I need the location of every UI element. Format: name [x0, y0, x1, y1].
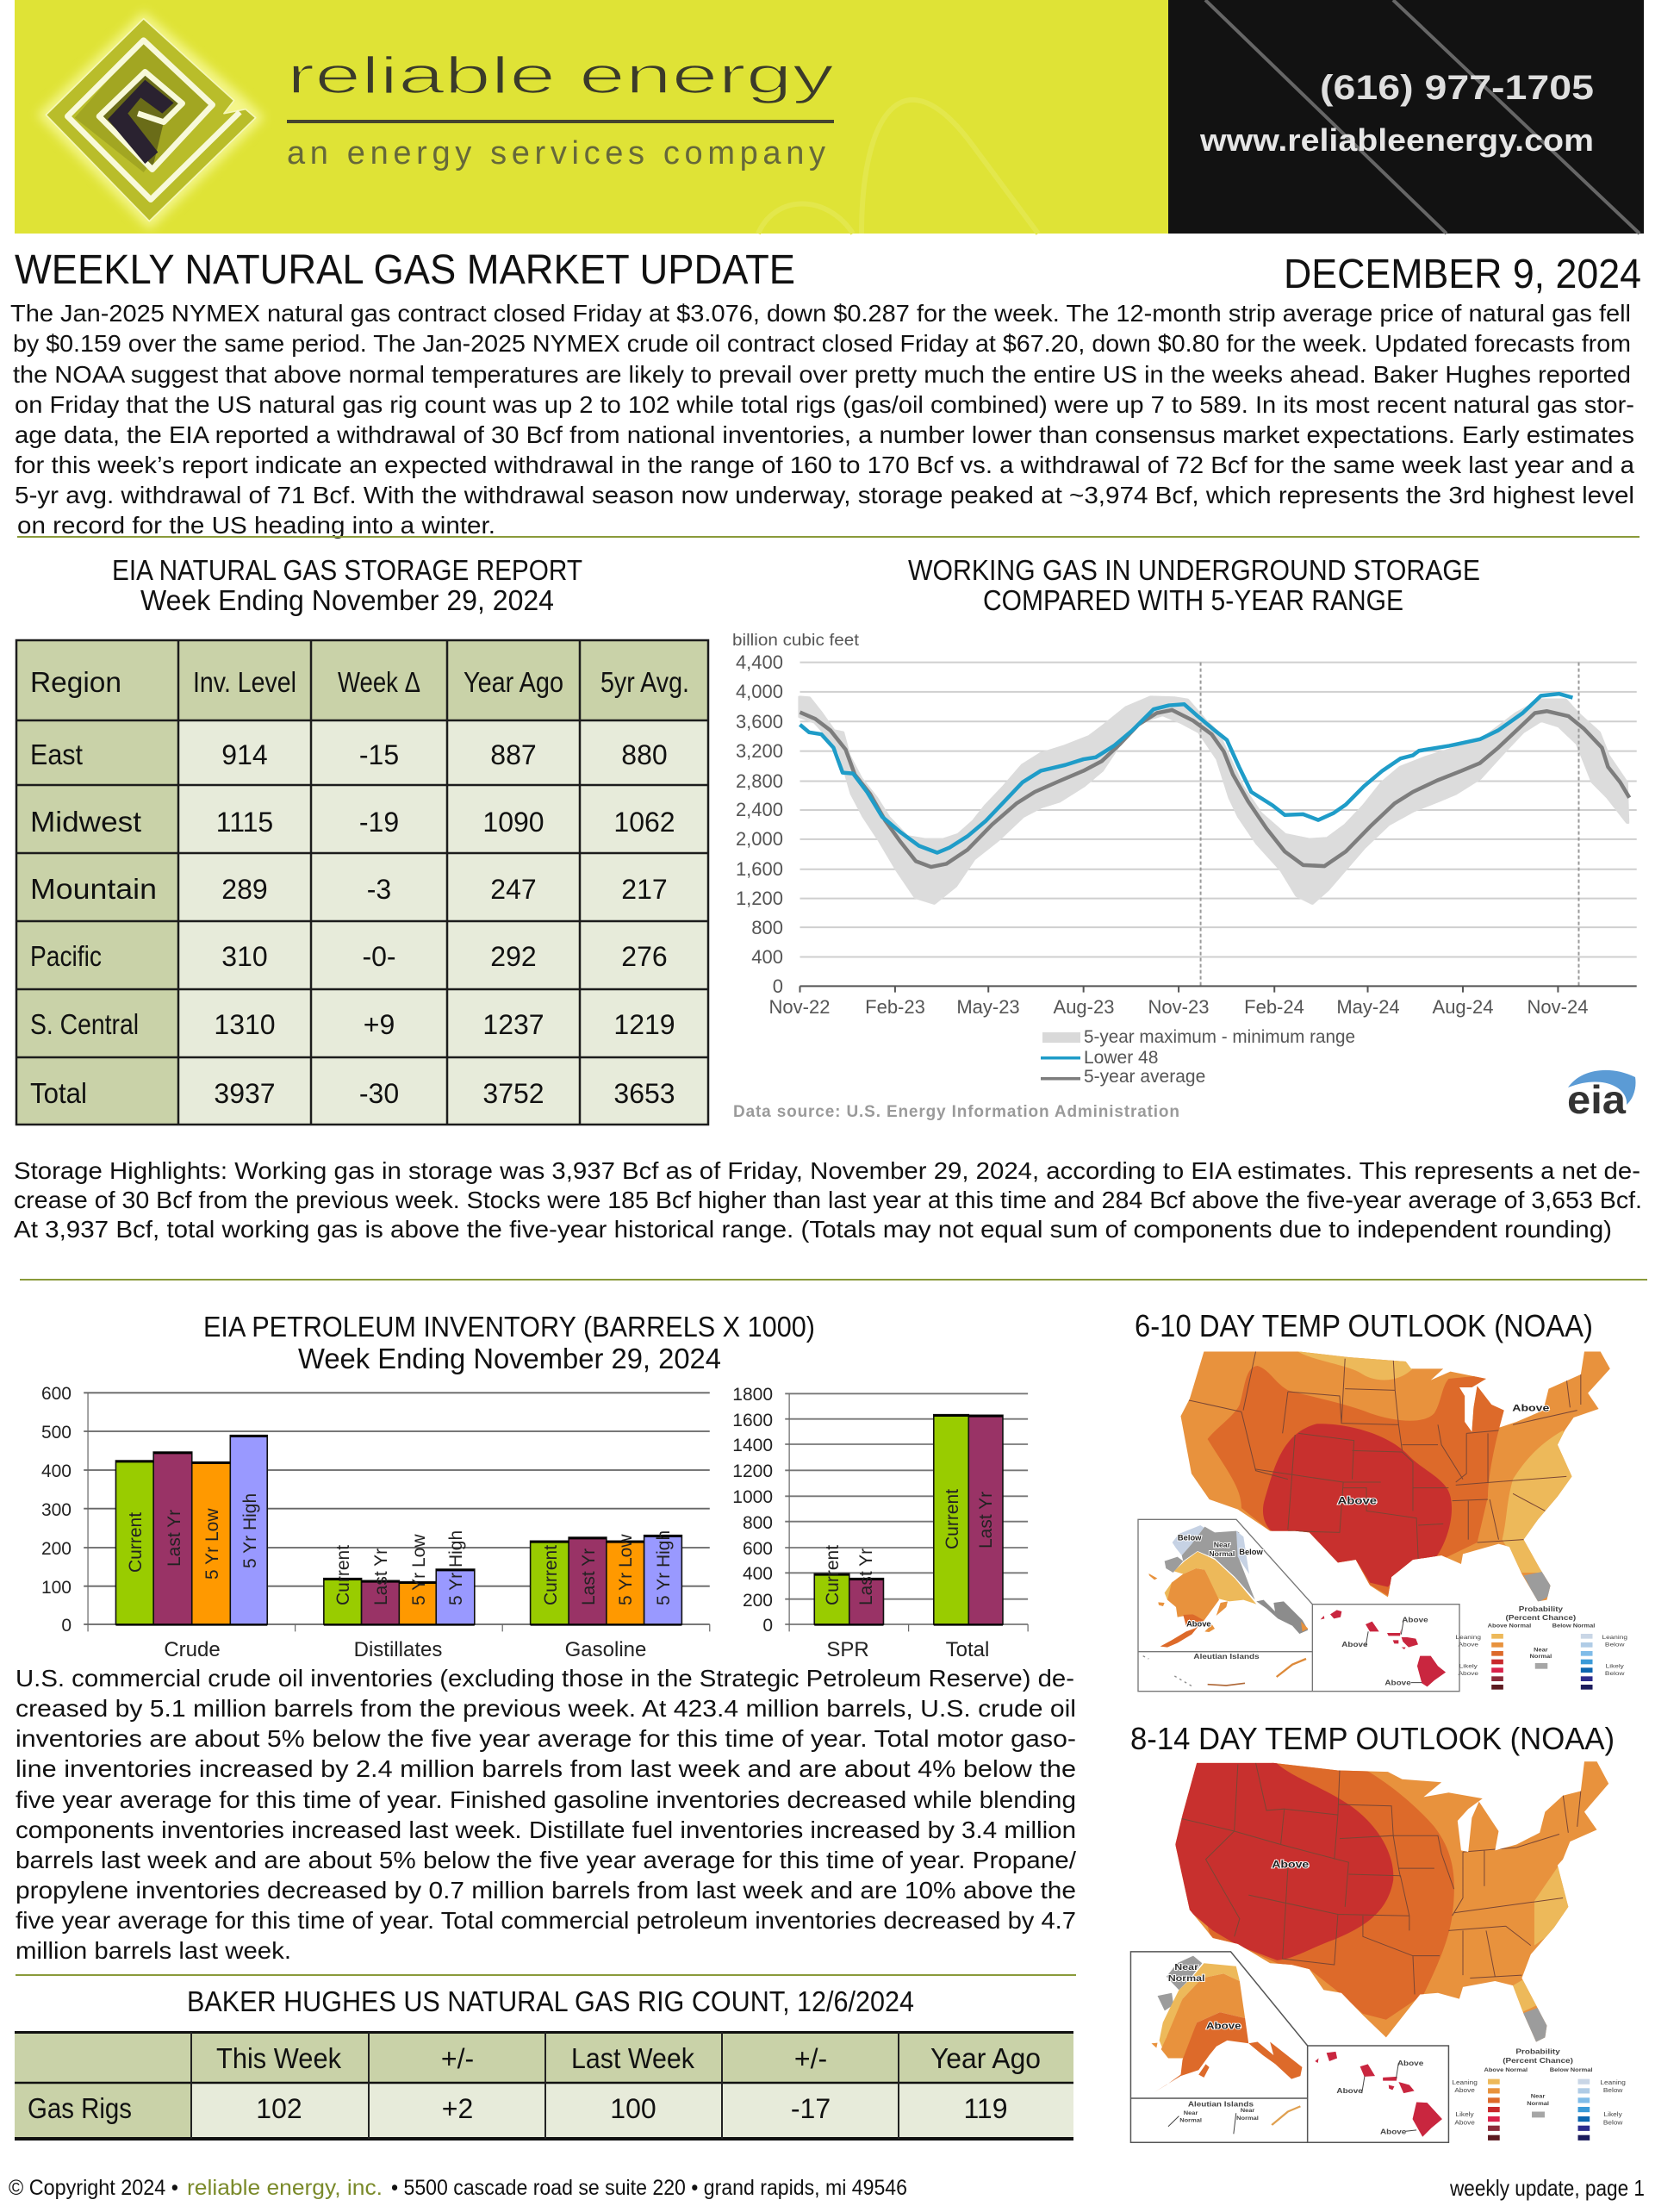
category labels: Gasoline	[565, 1638, 646, 1661]
map labels: Above	[1206, 2021, 1241, 2031]
contact panel diagonal lines	[1205, 0, 1640, 234]
y axis labels left: 100	[41, 1578, 72, 1598]
map legend: Near	[1534, 1648, 1548, 1653]
table: storage report: 1090	[482, 807, 544, 838]
footer: © Copyright 2024 •	[9, 2176, 178, 2200]
chart legend: Lower 48	[1084, 1048, 1158, 1068]
table: rig count: Year Ago	[930, 2042, 1041, 2074]
table: storage report: 1115	[216, 807, 273, 838]
map labels: Above	[1384, 1679, 1411, 1686]
y axis labels right: 1400	[732, 1436, 773, 1455]
map legend: Likely	[1604, 2111, 1622, 2118]
text block: petroleum commentary	[16, 1665, 1076, 1964]
y axis labels: 2,000	[736, 828, 783, 850]
map labels: Above	[1336, 2087, 1363, 2095]
table: storage report: 3752	[482, 1078, 544, 1109]
table: rig count: Gas Rigs	[28, 2092, 132, 2124]
x axis labels: Feb-23	[865, 996, 925, 1018]
Aleutian islands	[1272, 2106, 1300, 2125]
text block: market summary: on Friday that the US natural gas rig count was up 2 to 102 while total rigs (gas/oil combined) were up 7 to 589. In its most recent natural gas stor-	[15, 391, 1634, 418]
map labels: Aleutian Islands	[1193, 1653, 1260, 1661]
map labels: Normal	[1179, 2118, 1202, 2123]
text block: petroleum commentary: five year average for this time of year. Total commercial petroleum inventories decreased by 4.7	[16, 1907, 1076, 1934]
text block: petroleum commentary: barrels last week and are about 5% below the five year average for this time of year. Propane/	[16, 1847, 1076, 1873]
table: storage report: Region	[30, 666, 121, 698]
Hawaii leader lines	[1168, 2063, 1416, 2134]
chart legend: 5-year maximum - minimum range	[1084, 1027, 1355, 1047]
footer: • 5500 cascade road se suite 220 • grand rapids, mi 49546	[391, 2176, 907, 2200]
Alaska labels: Below	[1178, 1533, 1202, 1542]
table: storage report: 310	[221, 941, 268, 972]
text block: market summary: age data, the EIA reported a withdrawal of 30 Bcf from national inventories, a number lower than consensus market expectations. Early estimates	[15, 421, 1634, 448]
rotated bar labels: 5 Yr Low	[616, 1534, 636, 1605]
y axis labels: 3,600	[736, 711, 783, 732]
text block: petroleum commentary: inventories are about 5% below the five year average for this time of year. Total motor gaso-	[16, 1725, 1076, 1752]
map labels: Above	[1341, 1641, 1368, 1648]
y axis labels left: 400	[41, 1461, 72, 1481]
rotated bar labels	[126, 1489, 996, 1605]
text block: market summary: 5-yr avg. withdrawal of 71 Bcf. With the withdrawal season now underway, storage peaked at ~3,974 Bcf, which represents the 3rd highest level	[15, 482, 1634, 508]
table: storage report: Pacific	[30, 940, 102, 972]
table: storage report: -0-	[362, 941, 396, 972]
Hawaii small islands	[1321, 1610, 1418, 1649]
table: storage report: 887	[490, 739, 537, 770]
heading: petroleum inventory: Week Ending November 29, 2024	[298, 1343, 721, 1374]
table: storage report: 289	[221, 874, 268, 905]
map legend: Below	[1605, 1670, 1625, 1677]
category labels: Distillates	[354, 1638, 442, 1661]
y axis labels left: 0	[61, 1616, 72, 1636]
table: storage report: Total	[30, 1077, 87, 1109]
company tagline: an energy services company	[287, 135, 825, 171]
chart legend	[1041, 1027, 1355, 1087]
Hawaii islands	[1315, 2052, 1442, 2137]
rotated bar labels: Current	[333, 1545, 353, 1605]
rotated bar labels: Last Yr	[856, 1549, 876, 1605]
table: storage report: 3937	[214, 1078, 276, 1109]
text block: storage highlights: crease of 30 Bcf from the previous week. Stocks were 185 Bcf higher than last year at this time and 284 Bcf above the five-year average of 3,653 Bcf.	[14, 1187, 1642, 1213]
table: storage report: 247	[490, 874, 537, 905]
map legend	[1455, 1605, 1627, 1690]
table: storage report: Inv. Level	[193, 666, 296, 698]
text block: market summary: by $0.159 over the same period. The Jan-2025 NYMEX crude oil contract closed Friday at $67.20, down $0.80 for the week. Updated forecasts from	[13, 330, 1631, 357]
map legend: Probability	[1515, 2047, 1561, 2055]
text block: petroleum commentary: U.S. commercial crude oil inventories (excluding those in the Strategic Petroleum Reserve) de-	[16, 1665, 1074, 1692]
x axis labels: Nov-24	[1528, 996, 1588, 1018]
contiguous US zones	[1173, 1347, 1620, 1605]
heading: 6-10 day outlook: 6-10 DAY TEMP OUTLOOK (NOAA)	[1135, 1308, 1593, 1343]
rotated bar labels: 5 Yr High	[654, 1530, 674, 1605]
table: storage report: 292	[490, 941, 537, 972]
y axis labels right: 800	[743, 1513, 773, 1533]
text block: petroleum commentary: creased by 5.1 million barrels from the previous week. At 423.4 million barrels, U.S. crude oil	[16, 1695, 1076, 1722]
map legend	[1452, 2047, 1626, 2141]
map labels: Normal	[1168, 1974, 1205, 1984]
text block: petroleum commentary: line inventories increased by 2.4 million barrels from last week and are about 4% below the	[16, 1755, 1076, 1782]
contact panel	[1168, 0, 1644, 234]
footer: weekly update, page 1	[1449, 2175, 1645, 2201]
map legend: Leaning	[1600, 2078, 1626, 2086]
map legend: (Percent Chance)	[1506, 1614, 1576, 1622]
x axis labels: May-23	[956, 996, 1020, 1018]
text block: storage highlights: Storage Highlights: Working gas in storage was 3,937 Bcf as of Friday, November 29, 2024, according to EIA estimates. This represents a net de-	[14, 1157, 1640, 1184]
map legend: Below	[1603, 2119, 1623, 2126]
icon: reliable energy diamond logo	[37, 11, 264, 230]
map legend: Below	[1603, 2086, 1623, 2094]
table: rig count: -17	[791, 2093, 831, 2124]
table: storage report: East	[30, 738, 83, 770]
chart unit label: billion cubic feet	[732, 632, 860, 650]
y axis labels: 4,400	[736, 651, 783, 673]
x axis labels: Nov-23	[1148, 996, 1209, 1018]
y axis labels: 2,400	[736, 799, 783, 820]
Alaska labels	[1178, 1533, 1263, 1629]
rotated bar labels: Current	[823, 1545, 843, 1605]
table: storage report: 914	[221, 739, 268, 770]
Alaska zones	[1151, 1956, 1302, 2092]
table: rig count: 100	[610, 2093, 656, 2124]
map legend: Normal	[1530, 1654, 1552, 1660]
map: 8-14 day temperature outlook	[1130, 1759, 1626, 2142]
contiguous US zones	[1170, 1759, 1616, 2047]
y axis labels: 4,000	[736, 681, 783, 702]
category labels: Total	[946, 1638, 989, 1661]
rotated bar labels: Current	[943, 1489, 962, 1549]
y axis labels	[736, 651, 783, 997]
chart plot curves	[800, 663, 1637, 993]
map legend: Below	[1605, 1641, 1625, 1648]
map labels	[1168, 1859, 1423, 2135]
icon: eia logo: eia	[1567, 1077, 1626, 1122]
table: storage report: 1062	[613, 807, 675, 838]
contiguous US, legend and labels	[1173, 1347, 1627, 1690]
heading: petroleum inventory	[203, 1311, 815, 1374]
banner swirl decoration	[758, 100, 1038, 234]
heading: working gas chart: COMPARED WITH 5-YEAR RANGE	[983, 584, 1403, 616]
map legend: Above Normal	[1488, 1623, 1531, 1629]
rotated bar labels: Last Yr	[371, 1549, 391, 1605]
text block: petroleum commentary: five year average for this time of year. Finished gasoline inventories decreased while blending	[16, 1786, 1076, 1813]
y axis labels: 800	[751, 917, 783, 938]
x axis labels: Feb-24	[1244, 996, 1304, 1018]
y axis labels: 400	[751, 946, 783, 968]
map legend: Above	[1458, 1670, 1478, 1677]
rotated bar labels: 5 Yr High	[446, 1530, 466, 1605]
table: rig count: This Week	[216, 2042, 341, 2074]
text block: petroleum commentary: components inventories increased last week. Distillate fuel inventories increased by 3.4 million	[16, 1817, 1076, 1843]
heading: working gas chart: WORKING GAS IN UNDERGROUND STORAGE	[908, 554, 1480, 586]
table: rig count: 119	[963, 2093, 1008, 2124]
y axis labels right: 1800	[732, 1385, 773, 1405]
map: 6-10 day temperature outlook	[1138, 1347, 1627, 1692]
table: storage report: S. Central	[30, 1008, 139, 1040]
table: storage report: +9	[364, 1009, 395, 1040]
category labels	[164, 1638, 989, 1661]
Alaska inset	[1138, 1519, 1459, 1692]
y axis labels: 0	[773, 975, 783, 997]
map legend: Above	[1454, 2086, 1475, 2094]
chart legend: 5-year average	[1084, 1067, 1205, 1087]
map labels: Near	[1184, 2110, 1198, 2116]
y axis labels left: 200	[41, 1539, 72, 1559]
map legend: Leaning	[1452, 2078, 1478, 2086]
map legend: Near	[1531, 2094, 1546, 2099]
header banner	[15, 0, 1644, 234]
text block: petroleum commentary: propylene inventories decreased by 0.7 million barrels from last week and are 10% above the	[16, 1877, 1076, 1904]
map legend: Likely	[1455, 2111, 1474, 2118]
x axis labels: Aug-24	[1433, 996, 1493, 1018]
map labels: Above	[1272, 1859, 1309, 1870]
text block: market summary: for this week’s report indicate an expected withdrawal in the range of 160 to 170 Bcf vs. a withdrawal of 72 Bcf for the same week last year and a	[15, 452, 1634, 478]
x axis labels: Nov-22	[769, 996, 830, 1018]
rotated bar labels: 5 Yr High	[240, 1493, 260, 1568]
lime banner panel	[15, 0, 1168, 234]
y axis labels left: 500	[41, 1423, 72, 1443]
data source: Data source: U.S. Energy Information Administration	[733, 1103, 1179, 1121]
category labels: Crude	[164, 1638, 221, 1661]
map labels: Above	[1338, 1495, 1378, 1506]
y axis labels right	[732, 1385, 773, 1636]
table: storage report: Year Ago	[464, 666, 563, 698]
heading: petroleum inventory: EIA PETROLEUM INVENTORY (BARRELS X 1000)	[203, 1311, 815, 1343]
table: storage report: -19	[359, 807, 399, 838]
y axis labels: 1,200	[736, 888, 783, 909]
y axis labels right: 0	[762, 1616, 773, 1636]
company name: reliable energy	[287, 47, 834, 104]
map labels	[1193, 1402, 1549, 1686]
table: storage report: -15	[359, 739, 399, 770]
table: rig count: Last Week	[571, 2042, 694, 2074]
Alaska and Hawaii inset frame	[1130, 1952, 1448, 2142]
map legend: Above	[1454, 2119, 1475, 2126]
footer: reliable energy, inc.	[187, 2176, 383, 2200]
table: storage report: 1219	[613, 1009, 675, 1040]
table: storage report: 880	[621, 739, 668, 770]
y axis labels right: 1200	[732, 1461, 773, 1481]
y axis labels left: 300	[41, 1500, 72, 1520]
y axis labels left: 600	[41, 1384, 72, 1404]
x axis labels: May-24	[1336, 996, 1400, 1018]
heading: working gas chart	[908, 554, 1480, 616]
logo rule	[287, 120, 834, 123]
Alaska labels: Near	[1214, 1540, 1231, 1549]
icon: eia logo	[1567, 1070, 1636, 1122]
heading: EIA storage report: EIA NATURAL GAS STORAGE REPORT	[112, 554, 582, 586]
map labels: Above	[1512, 1402, 1549, 1413]
heading: EIA storage report: Week Ending November 29, 2024	[140, 584, 554, 616]
x axis labels	[769, 996, 1588, 1018]
y axis labels left	[41, 1384, 72, 1636]
table: storage report	[16, 639, 709, 1125]
map legend: Likely	[1606, 1662, 1624, 1669]
website: www.reliableenergy.com	[1199, 122, 1594, 158]
y axis labels right: 1000	[732, 1487, 773, 1507]
Alaska zones	[1173, 1525, 1204, 1555]
map legend: Below Normal	[1552, 1623, 1596, 1629]
table: storage report: 3653	[613, 1078, 675, 1109]
rotated bar labels: Current	[126, 1512, 146, 1573]
table: storage report: Midwest	[30, 806, 141, 838]
y axis labels right: 400	[743, 1564, 773, 1584]
rotated bar labels: Current	[541, 1545, 561, 1605]
map legend: Above Normal	[1484, 2067, 1528, 2073]
title: WEEKLY NATURAL GAS MARKET UPDATE	[15, 247, 795, 293]
table: storage report: Mountain	[30, 873, 157, 905]
rotated bar labels: Last Yr	[976, 1492, 996, 1549]
category labels: SPR	[826, 1638, 869, 1661]
map labels: Near	[1241, 2109, 1255, 2114]
Alaska labels: Normal	[1209, 1549, 1235, 1558]
text block: market summary	[10, 300, 1634, 539]
text block: market summary: on record for the US heading into a winter.	[17, 512, 495, 539]
table: rig count: +/-	[441, 2043, 474, 2074]
footer	[9, 2175, 1645, 2201]
heading: rig count: BAKER HUGHES US NATURAL GAS RIG COUNT, 12/6/2024	[187, 1985, 914, 2017]
table: rig count: +2	[442, 2093, 473, 2124]
map legend: Likely	[1459, 1662, 1478, 1669]
map labels: Above	[1397, 2060, 1423, 2067]
table: storage report: -30	[359, 1078, 399, 1109]
map legend: Normal	[1527, 2101, 1549, 2107]
x axis labels: Aug-23	[1054, 996, 1114, 1018]
y axis labels: 2,800	[736, 770, 783, 792]
Alaska labels: Below	[1239, 1548, 1263, 1556]
text block: petroleum commentary: million barrels last week.	[16, 1937, 291, 1964]
map legend: Leaning	[1455, 1634, 1481, 1641]
map legend: (Percent Chance)	[1503, 2057, 1573, 2065]
y axis labels right: 1600	[732, 1411, 773, 1430]
table: rig count: 102	[256, 2093, 302, 2124]
Hawaii leader lines	[1366, 1618, 1422, 1683]
table: storage report: Week Δ	[338, 666, 420, 698]
map legend: Below Normal	[1550, 2067, 1593, 2073]
table: storage report: 217	[621, 874, 668, 905]
y axis labels right: 600	[743, 1539, 773, 1559]
line chart: working gas in storage	[732, 632, 1637, 1122]
text block: market summary: The Jan-2025 NYMEX natural gas contract closed Friday at $3.076, down $0.287 for the week. The 12-month strip average price of natural gas fell	[10, 300, 1631, 327]
phone number: (616) 977-1705	[1320, 69, 1594, 107]
plot area and bars	[84, 1393, 1028, 1631]
y axis labels: 3,200	[736, 740, 783, 762]
table: rig count	[15, 2032, 1073, 2140]
rotated bar labels: 5 Yr Low	[202, 1508, 222, 1580]
text block: storage highlights	[14, 1157, 1642, 1243]
y axis labels right: 200	[743, 1591, 773, 1611]
rotated bar labels: Last Yr	[579, 1549, 599, 1605]
text block: storage highlights: At 3,937 Bcf, total working gas is above the five-year historical range. (Totals may not equal sum of components due to independent rounding)	[14, 1216, 1612, 1243]
rotated bar labels: Last Yr	[165, 1510, 184, 1567]
map legend: Leaning	[1602, 1634, 1627, 1641]
rotated bar labels: 5 Yr Low	[409, 1534, 429, 1605]
map labels: Above	[1380, 2128, 1406, 2135]
table: storage report: 276	[621, 941, 668, 972]
table: rig count: +/-	[794, 2043, 827, 2074]
map labels: Near	[1174, 1963, 1199, 1972]
map legend: Above	[1458, 1641, 1478, 1648]
text block: market summary: the NOAA suggest that above normal temperatures are likely to prevail over pretty much the entire US in the weeks ahead. Baker Hughes reported	[13, 361, 1631, 388]
map labels: Aleutian Islands	[1188, 2100, 1254, 2108]
date: DECEMBER 9, 2024	[1284, 252, 1641, 297]
table: storage report: 1237	[482, 1009, 544, 1040]
table: storage report: 5yr Avg.	[600, 666, 689, 698]
table: storage report: -3	[367, 874, 391, 905]
map labels: Above	[1402, 1616, 1428, 1623]
map legend: Probability	[1519, 1605, 1563, 1613]
heading: 8-14 day outlook: 8-14 DAY TEMP OUTLOOK (NOAA)	[1130, 1721, 1615, 1756]
Alaska labels: Above	[1186, 1620, 1211, 1629]
y axis labels: 1,600	[736, 858, 783, 880]
table: storage report: 1310	[214, 1009, 276, 1040]
Hawaii big island	[1417, 1656, 1446, 1686]
heading: EIA storage report	[112, 554, 582, 616]
bar chart: petroleum inventory	[41, 1384, 1028, 1661]
map labels: Normal	[1236, 2116, 1259, 2122]
inset frame	[1138, 1519, 1459, 1692]
